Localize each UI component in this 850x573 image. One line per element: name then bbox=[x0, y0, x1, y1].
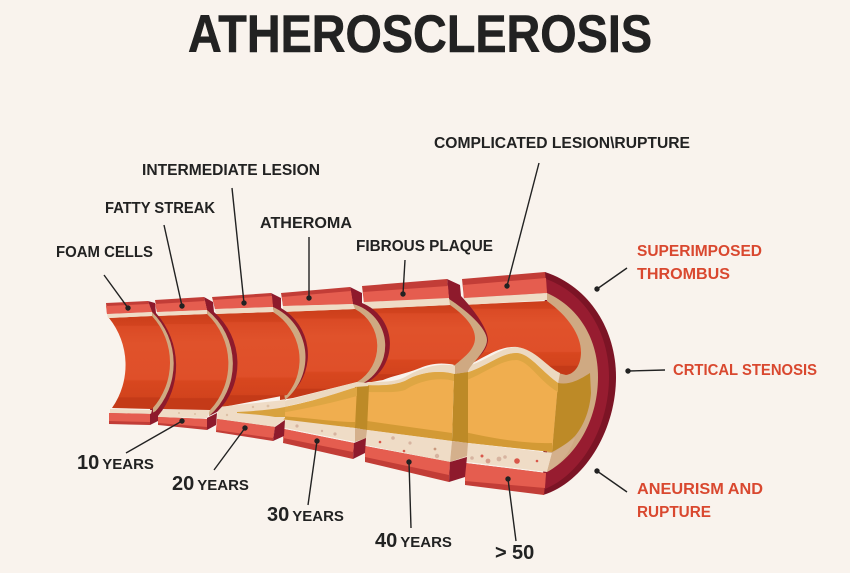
label: aneurism and rupture: ANEURISM AND bbox=[637, 481, 763, 498]
leader line: critical stenosis bbox=[625, 368, 665, 374]
leader line: fatty streak bbox=[164, 225, 185, 309]
leader line: atheroma bbox=[306, 237, 312, 301]
label: 40 years: 40YEARS bbox=[375, 530, 452, 552]
label: superimposed thrombus: THROMBUS bbox=[637, 266, 730, 283]
leader line: complicated lesion bbox=[504, 163, 539, 289]
label: foam cells: FOAM CELLS bbox=[56, 244, 153, 261]
leader line: 10 years bbox=[126, 418, 185, 453]
label: fatty streak: FATTY STREAK bbox=[105, 200, 215, 217]
label: superimposed thrombus: SUPERIMPOSED bbox=[637, 243, 762, 260]
label: atheroma: ATHEROMA bbox=[260, 215, 352, 232]
leader line: intermediate lesion bbox=[232, 188, 247, 306]
label: complicated lesion: COMPLICATED LESION\RUPTURE bbox=[434, 135, 690, 152]
leader line: 20 years bbox=[214, 425, 248, 470]
label: aneurism and rupture: RUPTURE bbox=[637, 504, 711, 521]
segment 6: complicated lesion bbox=[460, 272, 616, 495]
label: intermediate lesion: INTERMEDIATE LESION bbox=[142, 162, 320, 179]
title: ATHEROSCLEROSIS bbox=[188, 5, 652, 64]
segment 2: fatty streak bbox=[155, 297, 237, 430]
segment 3: intermediate lesion bbox=[212, 293, 308, 441]
label: 10 years: 10YEARS bbox=[77, 452, 154, 474]
label: aneurism and rupture bbox=[637, 481, 763, 521]
leader line: foam cells bbox=[104, 275, 131, 311]
label: 30 years: 30YEARS bbox=[267, 504, 344, 526]
leader line: 40 years bbox=[406, 459, 412, 528]
label: fibrous plaque: FIBROUS PLAQUE bbox=[356, 238, 493, 255]
artery illustration bbox=[106, 272, 616, 495]
label: 20 years: 20YEARS bbox=[172, 473, 249, 495]
leader line: superimposed thrombus bbox=[594, 268, 627, 292]
segment 1: foam cells bbox=[106, 301, 176, 425]
leader line: over 50 bbox=[505, 476, 516, 541]
segment 4: atheroma bbox=[280, 287, 390, 459]
leader line: fibrous plaque bbox=[400, 260, 406, 297]
segment 5: fibrous plaque bbox=[360, 279, 488, 482]
label: over 50: 50 bbox=[512, 542, 534, 564]
leader line: aneurism bbox=[594, 468, 627, 492]
label: over 50: > bbox=[495, 542, 507, 564]
leader line: 30 years bbox=[308, 438, 320, 505]
label: critical stenosis: CRTICAL STENOSIS bbox=[673, 362, 817, 379]
label: superimposed thrombus bbox=[637, 243, 762, 283]
